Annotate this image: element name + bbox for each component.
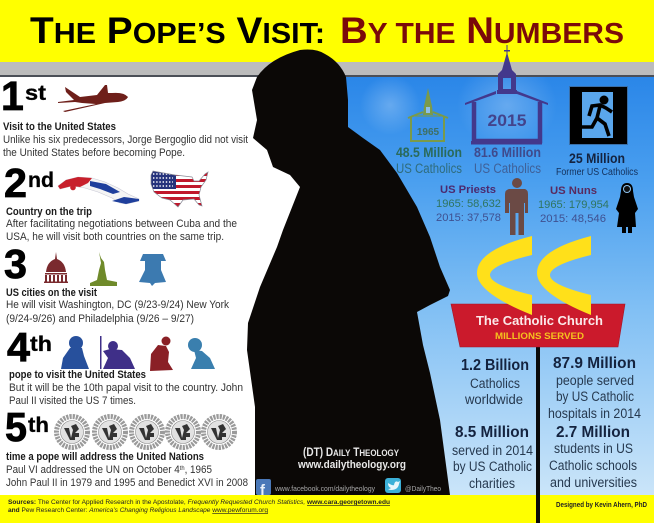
stat: US priests: US Priests <box>440 184 496 196</box>
stat: 87.9 million hospitals: hospitals in 2014 <box>548 406 641 421</box>
Daily Theology credit: (DT) DAILY THEOLOGY <box>303 445 400 459</box>
number: 2nd: nd <box>28 169 54 192</box>
icon: USA flag map <box>150 170 208 208</box>
stat: 87.9 million hospitals: people served <box>556 373 634 388</box>
number: 1st <box>1 73 46 119</box>
stat: 2.7 million students <box>549 424 637 490</box>
red Catholic Church sign: MILLIONS SERVED <box>495 331 585 341</box>
stat: 1.2 billion Catholics: 1.2 Billion <box>461 357 529 374</box>
stat: 2.7 million students: students in US <box>554 441 633 456</box>
text: three cities: He will visit Washington, DC (9/23-9/24) New York <box>6 299 229 311</box>
icon: pope silhouette teal <box>188 338 215 369</box>
icon: Liberty Bell <box>139 254 166 286</box>
stat: 1.2 billion Catholics <box>461 357 529 407</box>
Daily Theology credit: www.dailytheology.org <box>297 459 406 471</box>
stat: 25 million: Former US Catholics <box>556 167 638 178</box>
title <box>30 10 624 51</box>
text: fifth UN address: John Paul II in 1979 and 1995 and Benedict XVI in 2008 <box>6 477 248 489</box>
header band <box>0 0 654 77</box>
footer band <box>0 495 654 523</box>
icon: pope silhouette blue <box>61 336 89 369</box>
church 2015 <box>465 45 548 144</box>
panel: fifth UN address <box>5 404 248 489</box>
stat: 48.5 million: 48.5 Million <box>396 144 462 160</box>
Daily Theology credit <box>297 445 406 471</box>
golden C arches <box>477 236 591 315</box>
stat: 81.6 million <box>474 144 541 176</box>
icon: Statue of Liberty <box>90 252 117 286</box>
icon: Facebook <box>256 479 271 499</box>
number: 5th: th <box>28 414 49 437</box>
text: fifth UN address: Paul VI addressed the UN on October 4 <box>6 464 200 476</box>
text: three cities <box>6 287 229 325</box>
stat: 87.9 million hospitals: 87.9 Million <box>553 355 636 372</box>
text: fifth UN address: time a pope will address the United Nations <box>6 451 204 463</box>
stat: US nuns: US Nuns <box>550 185 597 197</box>
panel: three cities <box>4 241 229 325</box>
text: three cities: (9/24-9/26) and Philadelphia (9/26 – 9/27) <box>6 313 194 325</box>
number: 2nd <box>4 160 54 206</box>
stat: 48.5 million: US Catholics <box>396 161 462 176</box>
text: second country: Country on the trip <box>6 206 92 218</box>
number: 3: 3 <box>4 241 27 287</box>
panel: sky background <box>330 60 654 496</box>
red Catholic Church sign <box>451 236 625 347</box>
text: fifth UN address: , 1965 <box>185 464 212 476</box>
Facebook address: www.facebook.com/dailytheology <box>274 486 375 493</box>
stat: 8.5 million charities: 8.5 Million <box>455 424 529 441</box>
stat: US priests: 2015: 37,578 <box>436 212 501 224</box>
icon: Capitol dome <box>44 252 68 283</box>
icon: Cuba flag map <box>58 177 139 204</box>
stat: US priests <box>436 184 501 224</box>
stat: 8.5 million charities: by US Catholic <box>453 459 532 474</box>
panel: first visit <box>1 73 248 159</box>
stat: 2.7 million students: and universities <box>550 475 637 490</box>
icon: Facebook: f <box>260 482 266 499</box>
stat: 81.6 million: US Catholics <box>474 161 541 176</box>
stat: 87.9 million hospitals: by US Catholic <box>556 389 634 404</box>
stat: 81.6 million: 81.6 Million <box>474 144 541 160</box>
stat: 25 million: 25 Million <box>569 150 625 166</box>
icon: airplane <box>58 85 128 112</box>
icon: priest <box>505 178 528 235</box>
number: 4th <box>7 324 52 370</box>
text: fifth UN address <box>6 451 248 489</box>
stat: 48.5 million <box>396 144 462 176</box>
text: fourth pope: Paul II visited the US 7 times. <box>9 395 136 407</box>
stat: 1.2 billion Catholics: worldwide <box>464 392 523 407</box>
text: fourth pope: But it will be the 10th papal visit to the country. John <box>9 382 243 394</box>
stat: 8.5 million charities <box>452 424 533 491</box>
Twitter handle: @DailyTheo <box>405 486 441 493</box>
sources: and Pew Research Center: America’s Changing Religious Landscape www.pewforum.org <box>8 507 268 514</box>
sign post <box>536 346 540 523</box>
panel: fourth pope <box>7 324 243 407</box>
title: BY THE NUMBERS <box>340 10 624 51</box>
text: first visit: the United States before becoming Pope. <box>3 147 185 159</box>
text: second country: USA, he will visit both countries on the same trip. <box>6 231 224 243</box>
stat: 2.7 million students: 2.7 Million <box>556 424 630 441</box>
icon: pope silhouette red <box>150 336 173 371</box>
icon: Twitter <box>385 478 401 493</box>
stat: 2.7 million students: Catholic schools <box>549 458 637 473</box>
church 1965 <box>408 88 448 141</box>
text: fourth pope <box>9 369 243 407</box>
number: 1st: st <box>25 82 46 105</box>
text: first visit <box>3 121 248 159</box>
red Catholic Church sign: The Catholic Church <box>476 313 603 328</box>
stat: US nuns: 2015: 48,546 <box>540 213 606 225</box>
text: first visit: Visit to the United States <box>3 121 116 133</box>
number: 1st: 1 <box>1 73 24 119</box>
number: 5th: 5 <box>5 404 27 450</box>
number: 5th <box>5 404 49 450</box>
sources: Sources: The Center for Applied Research in the Apostolate, Frequently Requested Church Statistics, www.cara.georgetown.edu <box>8 499 390 506</box>
stat: 87.9 million hospitals <box>548 355 641 421</box>
stat: 8.5 million charities: charities <box>469 476 515 491</box>
text: fourth pope: pope to visit the United States <box>9 369 146 381</box>
icon: five UN emblems <box>56 416 234 448</box>
church 1965: 1965 <box>417 127 440 138</box>
panel: second country <box>5 168 237 242</box>
text: three cities: US cities on the visit <box>6 287 97 299</box>
stat: 25 million <box>556 150 638 178</box>
text: fifth UN address: th <box>180 465 185 472</box>
icon: nun <box>616 183 638 233</box>
stat: US priests: 1965: 58,632 <box>436 198 501 210</box>
stat: 1.2 billion Catholics: Catholics <box>470 376 520 391</box>
text: second country <box>6 206 237 243</box>
icon: pope silhouette purple with crozier <box>100 336 135 369</box>
text: second country: After facilitating negotiations between Cuba and the <box>6 218 237 230</box>
sources <box>8 499 390 514</box>
number: 2nd: 2 <box>4 160 27 206</box>
icon: exit door <box>570 86 628 144</box>
text: first visit: Unlike his six predecessors, Jorge Bergoglio did not visit <box>3 134 248 146</box>
pope silhouette <box>247 50 450 495</box>
stat: 8.5 million charities: served in 2014 <box>452 443 533 458</box>
number: 4th: 4 <box>7 324 30 370</box>
church 2015: 2015 <box>488 111 526 130</box>
stat: US nuns <box>538 185 609 225</box>
number: 4th: th <box>30 333 52 356</box>
title: THE POPE’S VISIT: <box>30 10 325 51</box>
stat: US nuns: 1965: 179,954 <box>538 199 609 211</box>
